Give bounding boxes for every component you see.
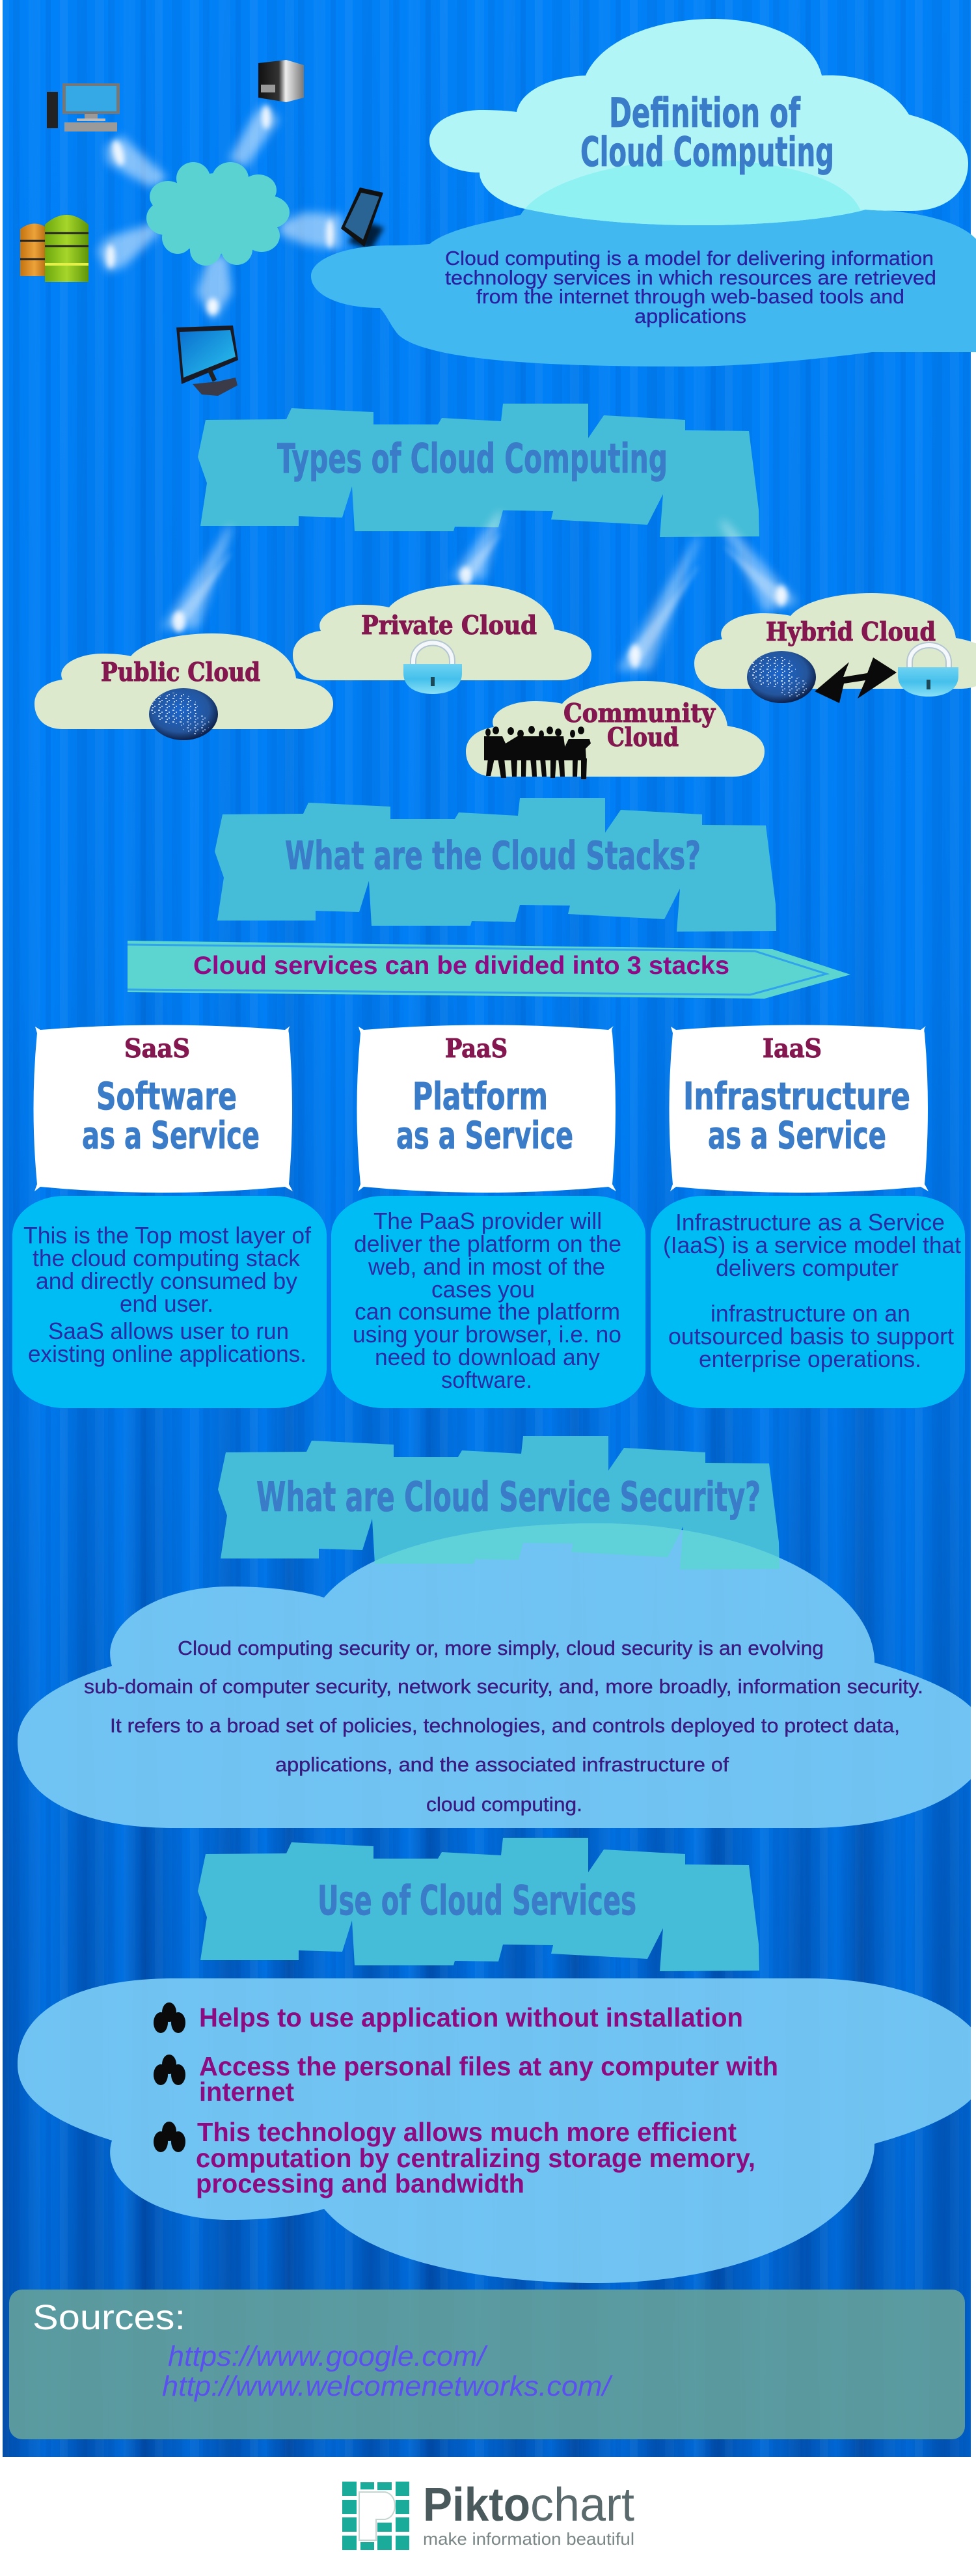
panel: sources	[9, 2290, 965, 2439]
definition text: applications	[634, 305, 746, 327]
panel: SaaS description: This is the Top most layer of	[23, 1222, 312, 1249]
icon: double arrow	[815, 658, 897, 703]
panel: sources: http://www.welcomenetworks.com/	[162, 2370, 613, 2402]
panel: SaaS description	[12, 1196, 327, 1408]
panel: sources: https://www.google.com/	[168, 2340, 488, 2372]
card: SaaS title	[34, 1025, 293, 1193]
card: IaaS title: IaaS	[763, 1034, 822, 1064]
cloud: hybrid cloud: Hybrid Cloud	[766, 617, 936, 647]
list: uses of cloud services: internet	[199, 2077, 294, 2107]
cloud: community cloud	[466, 681, 765, 779]
security text	[84, 1637, 923, 1816]
card: PaaS title: PaaS	[445, 1034, 508, 1064]
card: PaaS title: Platform	[413, 1074, 548, 1118]
panel: PaaS description: deliver the platform on the	[354, 1230, 621, 1257]
icon: globe	[747, 651, 816, 703]
list: uses of cloud services: This technology allows much more efficient	[197, 2117, 737, 2147]
icon: smartphone	[341, 187, 384, 250]
definition text: from the internet through web-based tools and	[476, 285, 904, 308]
panel: security heading banner	[218, 1436, 779, 1570]
cloud: public cloud: Public Cloud	[101, 658, 260, 687]
logo: Piktochart	[342, 2479, 634, 2550]
icon: padlock	[898, 645, 958, 697]
panel: IaaS description: outsourced basis to support	[668, 1323, 954, 1350]
icon: group of people	[484, 726, 591, 779]
heading: Use of Cloud Services: Use of Cloud Services	[318, 1877, 636, 1924]
icon: globe	[149, 688, 218, 740]
list: uses of cloud services: computation by centralizing storage memory,	[196, 2143, 755, 2173]
security text: Cloud computing security or, more simply, cloud security is an evolving	[178, 1637, 824, 1659]
cloud: private cloud: Private Cloud	[361, 611, 537, 641]
security text: applications, and the associated infrastructure of	[275, 1753, 729, 1776]
heading: Types of Cloud Computing: Types of Cloud Computing	[277, 435, 668, 482]
panel: PaaS description: need to download any	[375, 1344, 600, 1370]
arrows: beams to cloud types	[161, 512, 798, 671]
icon: bullet	[154, 2055, 185, 2085]
panel: stacks heading banner	[215, 798, 776, 932]
panel: SaaS description: and directly consumed by	[36, 1267, 297, 1294]
list: uses of cloud services	[154, 2002, 778, 2198]
panel: PaaS description: web, and in most of the	[368, 1253, 605, 1280]
cloud: private cloud	[293, 585, 591, 694]
panel: IaaS description: infrastructure on an	[711, 1300, 910, 1327]
definition text: Cloud computing is a model for delivering information	[445, 247, 934, 270]
icon: padlock	[403, 643, 462, 694]
icon: bullet	[154, 2002, 185, 2033]
card: PaaS title	[357, 1025, 616, 1193]
cloud: public cloud	[34, 633, 333, 740]
security text: It refers to a broad set of policies, technologies, and controls deployed to protect data,	[110, 1714, 900, 1737]
logo: Piktochart: Pikto	[423, 2479, 530, 2531]
panel: sources: Sources:	[33, 2298, 185, 2337]
arrow: three stacks banner: Cloud services can be divided into 3 stacks	[193, 952, 729, 980]
cloud: definition title cloud	[429, 19, 968, 225]
panel: PaaS description: using your browser, i.e. no	[353, 1321, 621, 1348]
panel: use heading banner	[198, 1838, 759, 1971]
card: SaaS title: SaaS	[124, 1034, 190, 1064]
title: Definition of Cloud Computing	[580, 89, 834, 176]
cloud: security	[18, 1523, 971, 1828]
panel: PaaS description: The PaaS provider will	[373, 1208, 602, 1234]
title: Definition of Cloud Computing: Cloud Computing	[580, 128, 834, 176]
network diagram: connection beams	[98, 104, 342, 322]
heading: What are the Cloud Stacks?: What are the Cloud Stacks?	[285, 833, 701, 879]
card: IaaS title: as a Service	[708, 1113, 886, 1157]
panel: PaaS description: software.	[441, 1366, 532, 1393]
panel: SaaS description: end user.	[120, 1290, 213, 1317]
icon: central cloud	[146, 162, 290, 266]
icon: server	[258, 60, 304, 102]
panel: IaaS description: enterprise operations.	[699, 1346, 921, 1372]
panel: PaaS description	[331, 1196, 645, 1408]
panel: PaaS description: cases you	[431, 1276, 535, 1303]
panel: IaaS description	[651, 1196, 965, 1408]
card: PaaS title: as a Service	[396, 1113, 573, 1157]
cloud overlap	[525, 159, 889, 225]
arrow: three stacks banner	[128, 941, 850, 999]
list: uses of cloud services: Helps to use application without installation	[199, 2002, 743, 2032]
cloud: hybrid cloud	[694, 593, 976, 703]
list: uses of cloud services: Access the personal files at any computer with	[199, 2051, 778, 2081]
panel: PaaS description: can consume the platform	[355, 1298, 620, 1325]
definition text: technology services in which resources are retrieved	[445, 266, 936, 289]
icon: database stack	[20, 215, 88, 282]
icon: tablet on stand	[176, 325, 238, 396]
icon: bullet	[154, 2122, 185, 2152]
heading: What are Cloud Service Security?: What are Cloud Service Security?	[256, 1473, 761, 1521]
panel: IaaS description: Infrastructure as a Service	[675, 1209, 945, 1236]
banner and cloud overlap	[375, 1523, 779, 1570]
card: SaaS title: Software	[96, 1074, 237, 1118]
security text: sub-domain of computer security, network security, and, more broadly, information security.	[84, 1675, 923, 1698]
logo: Piktochart: chart	[530, 2479, 634, 2531]
panel: IaaS description: delivers computer	[716, 1254, 899, 1281]
logo: Piktochart: make information beautiful	[423, 2529, 634, 2549]
card: IaaS title	[669, 1025, 929, 1193]
panel: SaaS description: SaaS allows user to run	[48, 1318, 289, 1344]
icon: logo grid	[342, 2482, 409, 2550]
cloud: use of services	[18, 1978, 971, 2283]
cloud: definition text cloud	[311, 159, 976, 367]
definition text	[445, 247, 936, 327]
list: uses of cloud services: processing and bandwidth	[196, 2168, 524, 2198]
card: IaaS title: Infrastructure	[683, 1074, 910, 1118]
title: Definition of Cloud Computing: Definition of	[609, 89, 801, 137]
security text: cloud computing.	[426, 1793, 582, 1816]
cloud: community cloud: Community	[563, 699, 716, 728]
panel: IaaS description: (IaaS) is a service model that	[663, 1232, 961, 1258]
panel: SaaS description: the cloud computing stack	[33, 1245, 301, 1271]
cloud: community cloud: Cloud	[607, 723, 679, 753]
icon: desktop computer	[47, 83, 120, 132]
panel: SaaS description: existing online applications.	[28, 1340, 306, 1367]
panel: types heading banner	[198, 404, 759, 537]
card: SaaS title: as a Service	[82, 1113, 260, 1157]
